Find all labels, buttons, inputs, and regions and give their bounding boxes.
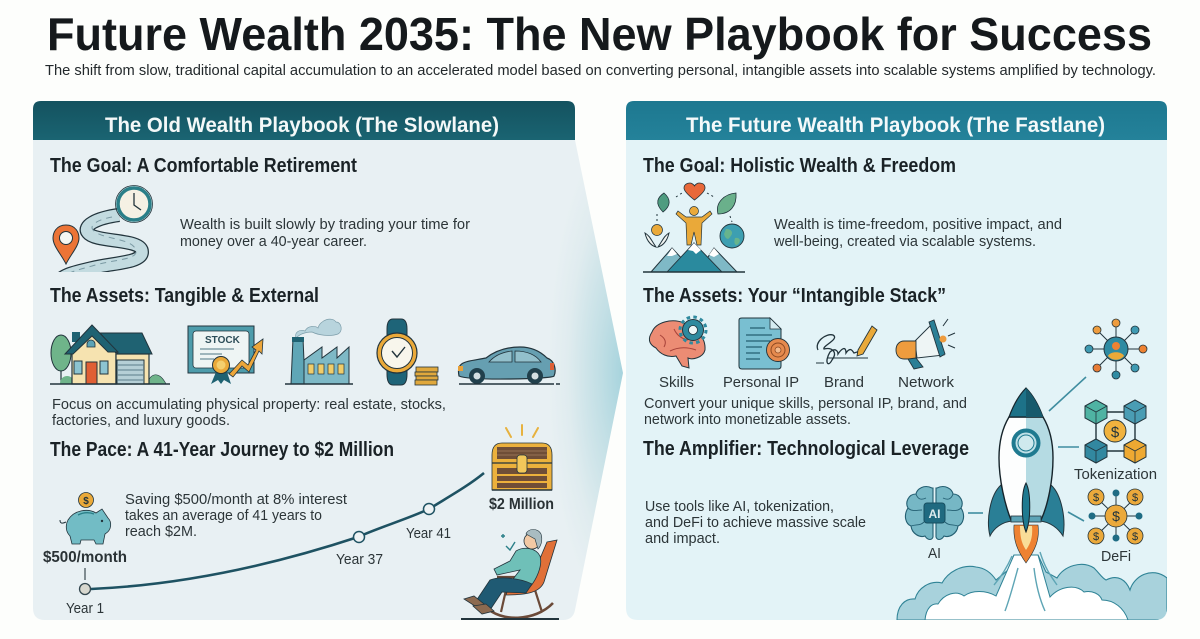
- heading: future assets: The Assets: Your “Intangible Stack”: [643, 285, 946, 307]
- panel header: fastlane: The Future Wealth Playbook (The Fastlane): [686, 114, 1105, 137]
- title: Future Wealth 2035: The New Playbook for Success: [47, 8, 1152, 60]
- icon: defi network: $: [1132, 492, 1138, 504]
- icon: skills brain and gear: [649, 317, 706, 368]
- icon: defi network: [1088, 489, 1143, 544]
- text: old assets description: factories, and luxury goods.: [52, 412, 230, 429]
- icon: treasure chest: [492, 425, 552, 490]
- text: old goal description: Wealth is built slowly by trading your time for: [180, 216, 470, 233]
- label: year 37: Year 37: [336, 551, 383, 568]
- text: amplifier description: and DeFi to achieve massive scale: [645, 514, 866, 531]
- icon: personal ip document: [739, 318, 790, 369]
- icon: factory: [285, 319, 353, 384]
- icon: tokenization cubes: $: [1111, 424, 1120, 441]
- label: personal ip: Personal IP: [723, 374, 799, 391]
- marker: year 37: [354, 532, 364, 542]
- icon: ai brain: AI: [928, 507, 940, 521]
- label: network: Network: [898, 374, 955, 391]
- label: $2 million: $2 Million: [489, 496, 554, 513]
- icon: retiree in rocking chair: [461, 530, 559, 619]
- label: ai: AI: [928, 545, 941, 562]
- icon: piggy bank: [60, 492, 111, 544]
- connector: rocket to tokenization: [1058, 446, 1079, 448]
- icon: defi network: $: [1093, 492, 1099, 504]
- icon: stock certificate: [188, 326, 263, 384]
- icon: clouds: [897, 552, 1167, 620]
- label: brand: Brand: [824, 374, 864, 391]
- icon: house: [50, 325, 170, 384]
- icon: defi network: $: [1093, 531, 1099, 543]
- icon: defi network: $: [1112, 508, 1120, 524]
- text: pace description: [125, 491, 348, 540]
- text: pace description: takes an average of 41 years to: [125, 507, 322, 524]
- heading: future goal: The Goal: Holistic Wealth & Freedom: [643, 155, 956, 177]
- panel: old wealth playbook: [33, 101, 623, 620]
- connector: rocket to network: [1049, 377, 1086, 411]
- label: year 41: Year 41: [406, 525, 451, 542]
- icon: rocket: [988, 388, 1064, 563]
- icon: tokenization cubes: [1085, 400, 1146, 463]
- panel header: slowlane: The Old Wealth Playbook (The Slowlane): [105, 114, 499, 137]
- text: amplifier description: and impact.: [645, 530, 720, 547]
- label: $500/month: $500/month: [43, 549, 127, 566]
- text: old goal description: [180, 216, 470, 250]
- text: future goal description: well-being, created via scalable systems.: [773, 233, 1036, 250]
- heading: future amplifier: The Amplifier: Technological Leverage: [643, 438, 969, 460]
- icon: car: [458, 347, 560, 384]
- text: future assets description: [644, 395, 967, 428]
- icon: piggy bank: $: [83, 496, 89, 507]
- marker: year 1: [80, 584, 90, 594]
- text: pace description: reach $2M.: [125, 523, 197, 540]
- icon: defi network: $: [1132, 531, 1138, 543]
- text: old assets description: Focus on accumulating physical property: real estate, stocks,: [52, 396, 446, 413]
- icon: ai brain: [905, 487, 964, 540]
- subtitle: The shift from slow, traditional capital accumulation to an accelerated model based on converting personal, intangible assets into scalable systems amplified by technology.: [45, 63, 1156, 79]
- heading: old pace: The Pace: A 41-Year Journey to $2 Million: [50, 439, 394, 461]
- icon: winding road with pin and clock: [52, 185, 153, 272]
- heading: old goal: The Goal: A Comfortable Retirement: [50, 155, 357, 177]
- icon: network megaphone: [896, 319, 955, 369]
- text: old assets description: [52, 396, 446, 429]
- panel header: fastlane: [626, 101, 1167, 140]
- chart: growth curve: [66, 473, 484, 617]
- text: future assets description: Convert your unique skills, personal IP, brand, and: [644, 395, 967, 412]
- icon: luxury watch and coins: [377, 319, 438, 385]
- icon: holistic wealth figure on mountain: [643, 183, 745, 272]
- text: future goal description: [773, 216, 1062, 250]
- icon: stock certificate: STOCK: [205, 335, 241, 346]
- icon: brand signature and pen: [816, 326, 877, 364]
- label: skills: Skills: [659, 374, 694, 391]
- icon: decentralized network: [1085, 319, 1147, 379]
- heading: old assets: The Assets: Tangible & External: [50, 285, 319, 307]
- panel: future wealth playbook: [626, 101, 1167, 620]
- label: defi: DeFi: [1101, 548, 1131, 565]
- text: old goal description: money over a 40-year career.: [180, 233, 367, 250]
- panel header: slowlane: [33, 101, 575, 140]
- marker: year 41: [424, 504, 434, 514]
- label: year 1: Year 1: [66, 600, 104, 617]
- connector: ai to rocket: [968, 512, 983, 514]
- text: amplifier description: [645, 498, 866, 547]
- text: amplifier description: Use tools like AI, tokenization,: [645, 498, 834, 515]
- text: future assets description: network into monetizable assets.: [644, 411, 851, 428]
- label: tokenization: Tokenization: [1074, 466, 1157, 483]
- text: pace description: Saving $500/month at 8% interest: [125, 491, 348, 508]
- text: future goal description: Wealth is time-freedom, positive impact, and: [774, 216, 1062, 233]
- connector: rocket to defi: [1068, 512, 1084, 521]
